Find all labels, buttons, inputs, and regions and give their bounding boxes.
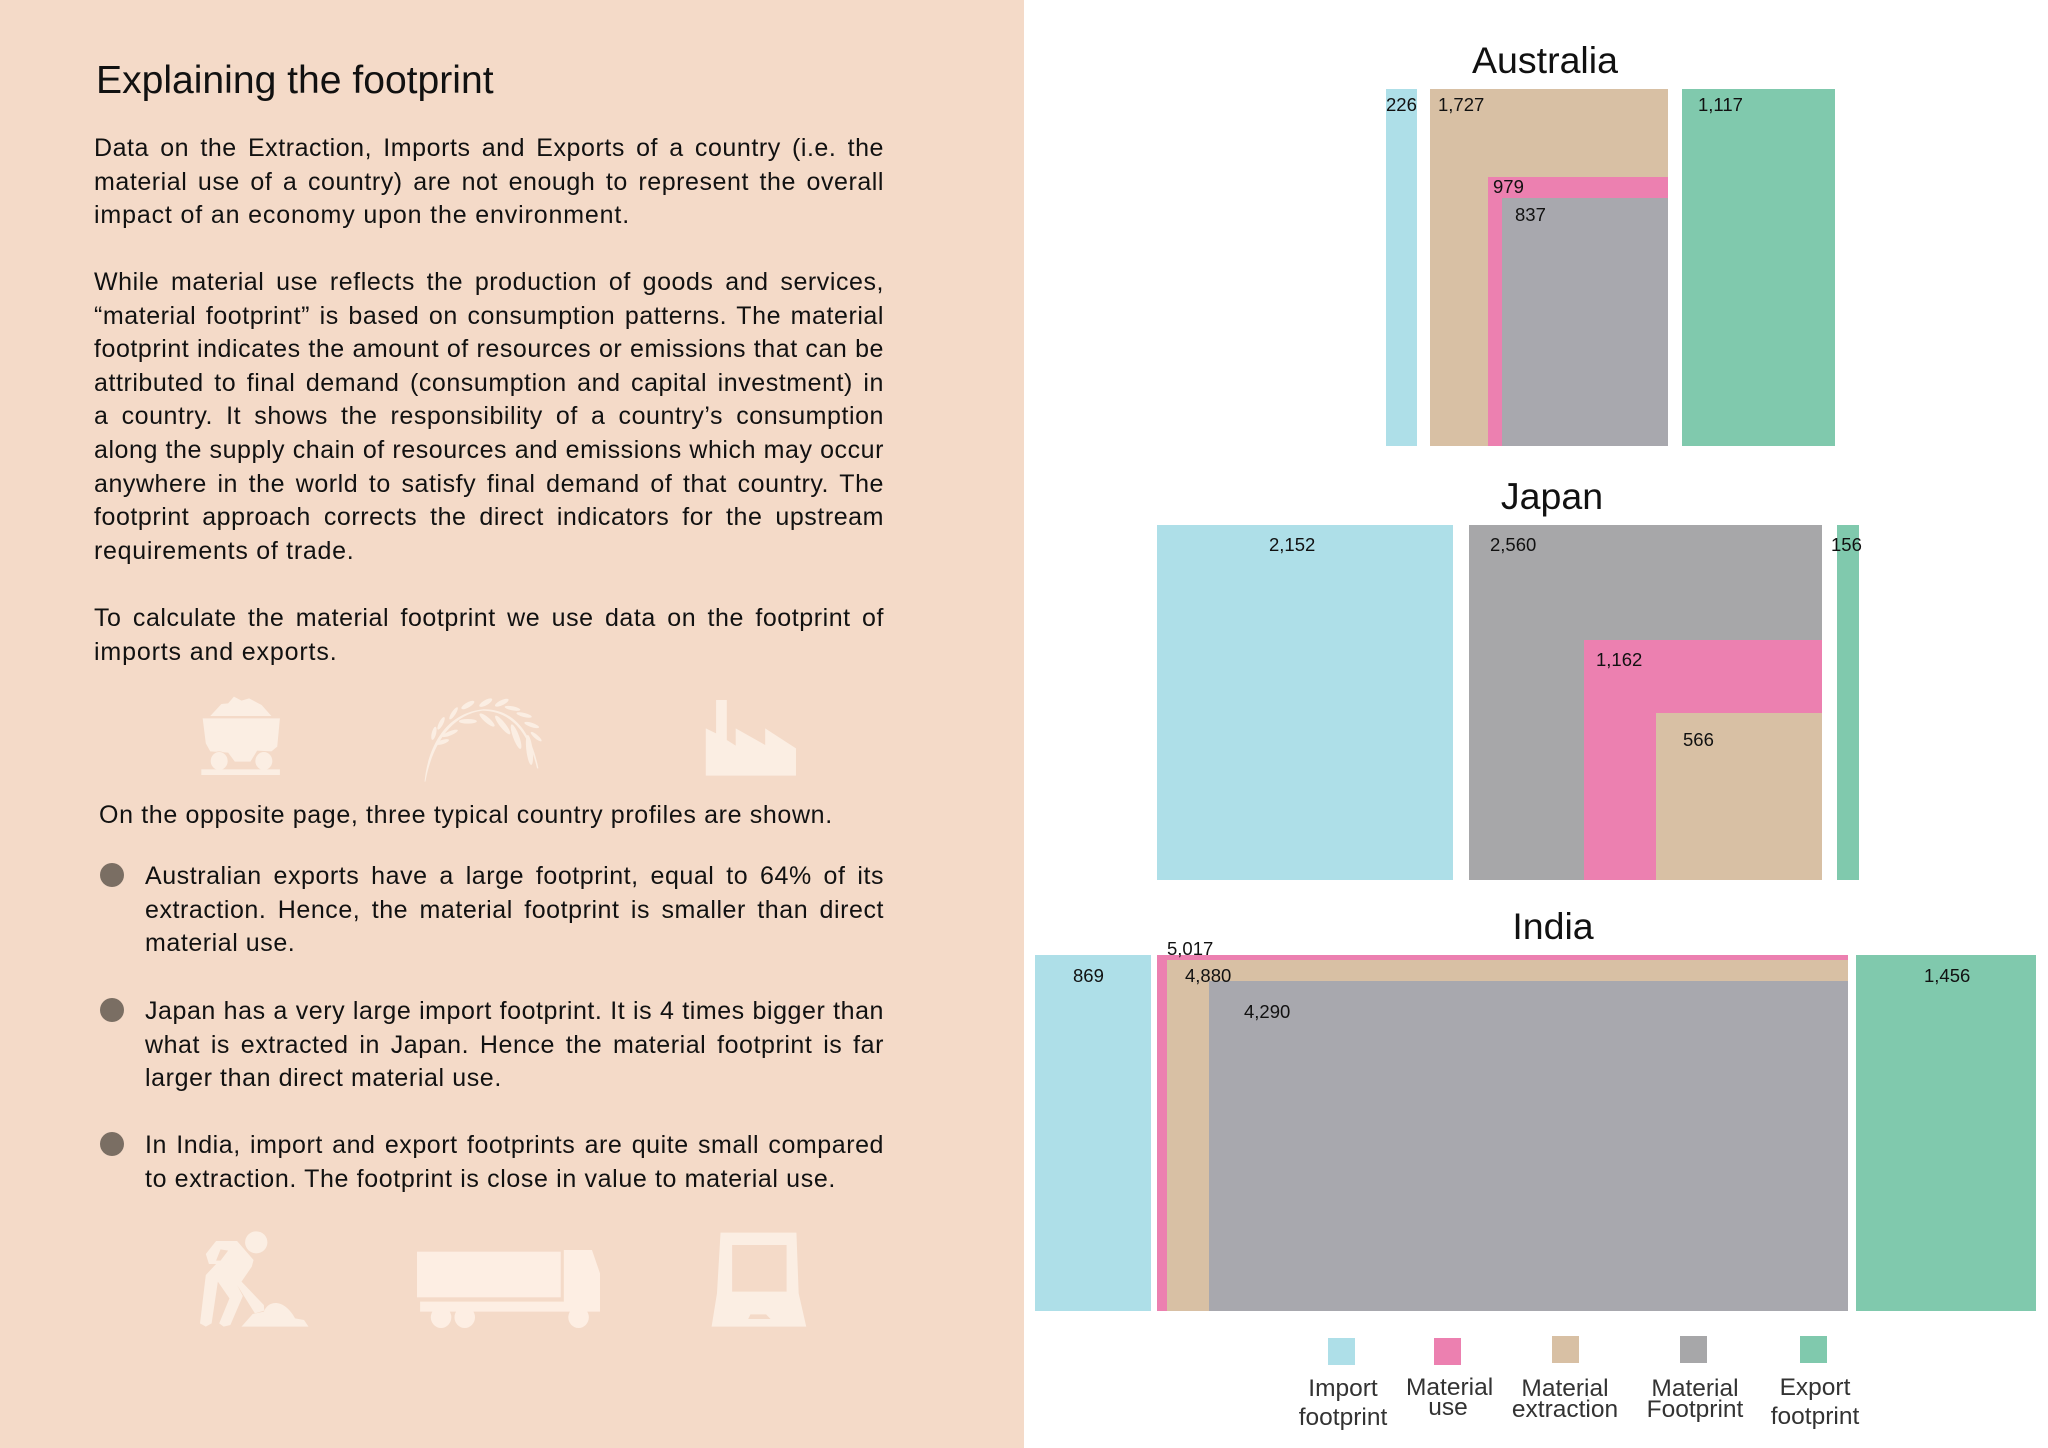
label: footprint 4,290: 4,290: [1244, 1001, 1290, 1022]
text block: calculation paragraph: [94, 604, 884, 666]
bar: import footprint: [1157, 525, 1453, 880]
text block: calculation paragraph: To calculate the material footprint we use data on the footprint of: [94, 604, 884, 632]
heading: Japan: Japan: [1501, 475, 1603, 517]
text block: material footprint paragraph: along the supply chain of resources and emissions which may occur: [94, 436, 884, 464]
legend label: Material: [1521, 1375, 1609, 1402]
label: extraction 1,727: 1,727: [1438, 94, 1484, 115]
label: extraction 4,880: 4,880: [1185, 965, 1231, 986]
heading: India: India: [1512, 905, 1594, 947]
bullet text: Australian exports have a large footprint, equal to 64% of its: [145, 862, 884, 890]
nested block: material use: [1584, 640, 1822, 880]
swatch: [1680, 1336, 1707, 1363]
bullet text: [145, 997, 884, 1092]
bullet text: [145, 862, 884, 957]
icon group: mine cart, rice, factory: [202, 696, 796, 782]
bar: export footprint: [1682, 89, 1835, 446]
bullet text: Japan has a very large import footprint. It is 4 times bigger than: [145, 997, 884, 1025]
legend label: Material: [1651, 1375, 1739, 1402]
bullet: Japan: [100, 997, 884, 1092]
label: import 226: 226: [1386, 94, 1417, 115]
text block: material footprint paragraph: While material use reflects the production of goods and services,: [94, 268, 884, 296]
icon: truck: [417, 1250, 600, 1328]
label: export 156: 156: [1831, 534, 1862, 555]
label: footprint 837: 837: [1515, 204, 1546, 225]
swatch: [1552, 1336, 1579, 1363]
bullet text: In India, import and export footprints are quite small compared: [145, 1131, 884, 1159]
text block: intro paragraph: Data on the Extraction, Imports and Exports of a country (i.e. the: [94, 134, 884, 162]
legend: [1299, 1336, 1860, 1431]
label: import 869: 869: [1073, 965, 1104, 986]
legend label: Export: [1780, 1374, 1850, 1401]
legend item: export footprint: [1771, 1336, 1860, 1430]
label: material use 979: 979: [1493, 176, 1524, 197]
chart: Japan: [1157, 475, 1862, 880]
legend label: Import: [1308, 1375, 1378, 1402]
text block: intro paragraph: impact of an economy upon the environment.: [94, 201, 630, 229]
title: Explaining the footprint: [96, 59, 494, 102]
chart: Australia: [1386, 39, 1835, 446]
label: export 1,117: 1,117: [1698, 94, 1743, 115]
bullet marker: [100, 863, 124, 887]
panel: explanation: [0, 0, 1024, 1448]
swatch: [1800, 1336, 1827, 1363]
label: material use 5,017: 5,017: [1167, 938, 1213, 959]
nested block: extraction: [1430, 89, 1668, 446]
text block: material footprint paragraph: attributed to final demand (consumption and capital investment) in: [94, 368, 884, 396]
nested block: material footprint: [1502, 198, 1668, 446]
icon: worker digging: [200, 1231, 308, 1327]
chart: India: [1035, 905, 2036, 1311]
nested block: material use: [1157, 955, 1848, 1311]
nested block: material use: [1488, 176, 1668, 446]
legend item: material extraction: [1512, 1336, 1618, 1423]
label: material use 1,162: 1,162: [1596, 649, 1642, 670]
label: footprint 2,560: 2,560: [1490, 534, 1536, 555]
label: import 2,152: 2,152: [1269, 534, 1315, 555]
text block: material footprint paragraph: anywhere in the world to satisfy final demand of that country. The: [94, 470, 884, 498]
text block: material footprint paragraph: “material footprint” is based on consumption patterns. The material: [94, 302, 884, 330]
icon: device: [712, 1233, 806, 1327]
bullet marker: [100, 1132, 124, 1156]
swatch: [1434, 1338, 1461, 1365]
text block: calculation paragraph: imports and exports.: [94, 638, 338, 666]
text block: country profiles intro: On the opposite page, three typical country profiles are shown.: [99, 801, 833, 829]
text block: material footprint paragraph: a country. It shows the responsibility of a country’s consumption: [94, 402, 884, 430]
text block: material footprint paragraph: requirements of trade.: [94, 536, 354, 564]
text block: intro paragraph: material use of a country) are not enough to represent the overall: [94, 168, 884, 196]
legend label: extraction: [1512, 1396, 1618, 1423]
text block: material footprint paragraph: [94, 268, 884, 564]
bullet: Australia: [100, 862, 884, 957]
bar: export footprint: [1837, 525, 1859, 880]
legend label: footprint: [1299, 1404, 1387, 1431]
bullet text: [145, 1131, 884, 1192]
nested block: extraction: [1656, 713, 1822, 880]
legend label: [1512, 1375, 1618, 1423]
bullet: India: [100, 1131, 884, 1192]
bullet text: what is extracted in Japan. Hence the material footprint is far: [145, 1030, 884, 1058]
icon group: worker, truck, device: [200, 1232, 806, 1328]
nested block: material footprint: [1469, 525, 1822, 880]
legend label: [1299, 1375, 1388, 1431]
bullet marker: [100, 998, 124, 1022]
nested block: material footprint: [1209, 981, 1848, 1311]
nested block: extraction: [1167, 960, 1848, 1311]
bullet text: material use.: [145, 929, 295, 957]
heading: Australia: Australia: [1472, 39, 1618, 81]
bullet text: larger than direct material use.: [145, 1064, 502, 1092]
legend item: import footprint: [1299, 1338, 1388, 1431]
text block: material footprint paragraph: footprint indicates the amount of resources or emissions that can be: [94, 335, 884, 363]
legend label: footprint: [1771, 1403, 1859, 1430]
label: export 1,456: 1,456: [1924, 965, 1970, 986]
text block: material footprint paragraph: footprint approach corrects the direct indicators for the upstream: [94, 503, 884, 531]
legend label: [1406, 1374, 1493, 1421]
bullet text: to extraction. The footprint is close in value to material use.: [145, 1164, 836, 1192]
legend label: Material: [1406, 1374, 1493, 1401]
icon: factory: [706, 700, 796, 776]
legend label: Footprint: [1647, 1396, 1743, 1423]
swatch: [1328, 1338, 1355, 1365]
legend item: material footprint: [1647, 1336, 1744, 1423]
icon: rice: [425, 697, 543, 782]
label: extraction 566: 566: [1683, 729, 1714, 750]
legend item: material use: [1406, 1338, 1493, 1421]
legend label: [1647, 1375, 1744, 1423]
bullet text: extraction. Hence, the material footprint is smaller than direct: [145, 896, 884, 924]
bar: import footprint: [1386, 89, 1417, 446]
bar: export footprint: [1856, 955, 2036, 1311]
legend label: use: [1428, 1394, 1468, 1421]
bar: import footprint: [1035, 955, 1151, 1311]
legend label: [1771, 1374, 1860, 1430]
icon: mine cart: [201, 697, 280, 775]
text block: intro paragraph: [94, 134, 884, 229]
